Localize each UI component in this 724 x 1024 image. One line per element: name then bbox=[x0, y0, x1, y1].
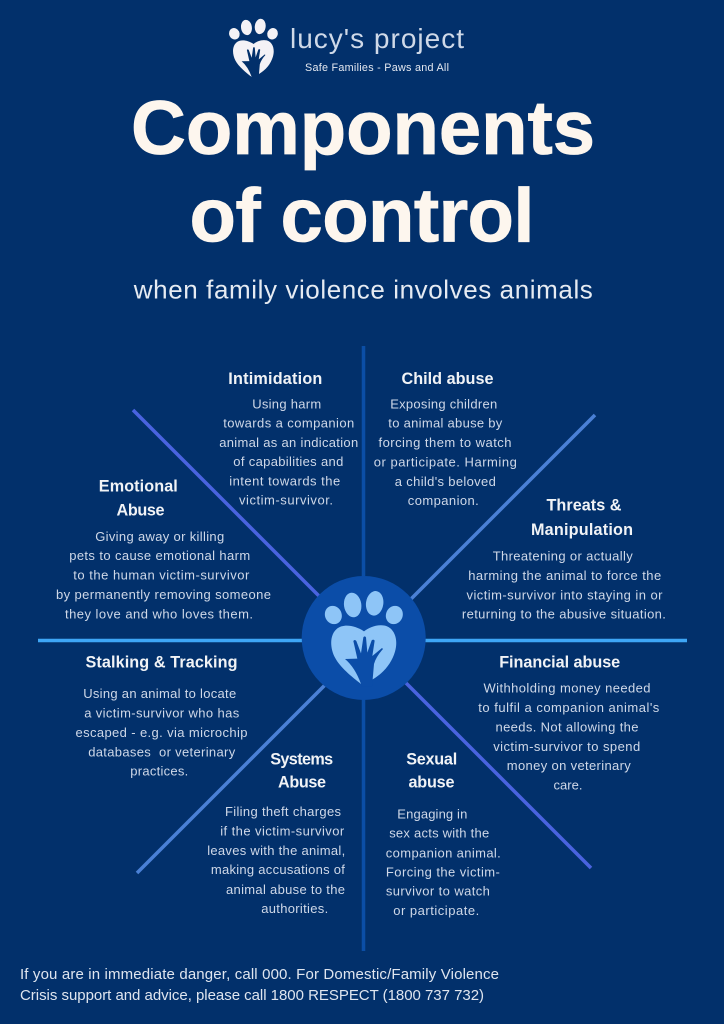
panel: sexual abuse bbox=[386, 750, 501, 918]
panel: systems abuse: Abuse bbox=[278, 774, 326, 792]
icon: logo paw and hand bbox=[227, 18, 280, 79]
panel: emotional abuse: by permanently removing someone bbox=[56, 587, 271, 602]
panel: threats and manipulation: Threats & bbox=[546, 497, 622, 515]
panel: sexual abuse: sex acts with the bbox=[389, 826, 489, 841]
panel: emotional abuse bbox=[56, 478, 271, 621]
panel: emotional abuse: Giving away or killing bbox=[95, 529, 224, 544]
panel: stalking and tracking: databases or veterinary bbox=[88, 744, 236, 760]
panel: sexual abuse: survivor to watch bbox=[386, 884, 490, 899]
panel: threats and manipulation bbox=[462, 497, 666, 622]
panel: intimidation: Intimidation bbox=[228, 370, 322, 388]
panel: intimidation: Using harm bbox=[252, 396, 321, 411]
panel: stalking and tracking: Using an animal to locate bbox=[83, 686, 236, 701]
panel: child abuse bbox=[374, 370, 517, 508]
panel: child abuse: Child abuse bbox=[402, 370, 494, 388]
panel: child abuse: Exposing children bbox=[390, 396, 497, 411]
title: Components bbox=[131, 86, 595, 171]
panel: stalking and tracking: a victim-survivor who has bbox=[84, 706, 240, 721]
spoke diagram lines bbox=[38, 346, 687, 951]
panel: sexual abuse: Engaging in bbox=[397, 806, 467, 821]
panel: child abuse: companion. bbox=[408, 493, 479, 508]
panel: intimidation: of capabilities and bbox=[233, 454, 343, 469]
panel: systems abuse: if the victim-survivor bbox=[220, 824, 345, 839]
panel: systems abuse: Filing theft charges bbox=[225, 804, 342, 819]
panel: child abuse: or participate. Harming bbox=[374, 454, 517, 470]
panel: stalking and tracking: escaped - e.g. via microchip bbox=[76, 725, 248, 740]
panel: financial abuse: needs. Not allowing the bbox=[496, 720, 638, 735]
panel: systems abuse: Systems bbox=[270, 750, 333, 768]
panel: sexual abuse: abuse bbox=[408, 774, 454, 792]
panel: child abuse: forcing them to watch bbox=[378, 435, 512, 450]
panel: threats and manipulation: victim-survivor into staying in or bbox=[466, 587, 663, 602]
panel: threats and manipulation: returning to the abusive situation. bbox=[462, 607, 666, 622]
panel: emotional abuse: Abuse bbox=[116, 501, 164, 519]
panel: financial abuse bbox=[478, 653, 660, 792]
panel: emotional abuse: pets to cause emotional harm bbox=[69, 548, 250, 563]
panel: systems abuse bbox=[207, 750, 345, 916]
panel: financial abuse: money on veterinary bbox=[507, 758, 631, 773]
logo: lucy's project bbox=[227, 18, 464, 79]
title bbox=[131, 86, 595, 258]
panel: emotional abuse: Emotional bbox=[99, 478, 178, 496]
panel: sexual abuse: Forcing the victim- bbox=[386, 865, 500, 880]
panel: financial abuse: Withholding money needed bbox=[484, 681, 650, 696]
panel: financial abuse: care. bbox=[554, 777, 582, 792]
panel: systems abuse: authorities. bbox=[261, 901, 328, 916]
panel: child abuse: a child's beloved bbox=[395, 474, 496, 489]
panel: emotional abuse: they love and who loves them. bbox=[65, 606, 253, 621]
panel: financial abuse: to fulfil a companion animal's bbox=[478, 700, 660, 715]
panel: stalking and tracking: Stalking & Tracking bbox=[86, 653, 238, 671]
panel: sexual abuse: Sexual bbox=[406, 750, 457, 768]
panel: stalking and tracking bbox=[76, 653, 248, 778]
panel: sexual abuse: or participate. bbox=[393, 903, 479, 918]
title: of control bbox=[190, 174, 534, 258]
panel: systems abuse: animal abuse to the bbox=[226, 882, 345, 897]
footer: crisis support: If you are in immediate danger, call 000. For Domestic/Family Violence bbox=[20, 966, 499, 983]
panel: intimidation: victim-survivor. bbox=[239, 492, 333, 508]
panel: intimidation: towards a companion bbox=[223, 416, 354, 431]
logo wordmark: lucy's project bbox=[290, 23, 464, 54]
panel: systems abuse: making accusations of bbox=[211, 862, 345, 877]
panel: threats and manipulation: Manipulation bbox=[531, 521, 633, 539]
panel: financial abuse: Financial abuse bbox=[499, 653, 620, 671]
central badge: paw and hand bbox=[302, 576, 426, 700]
panel: intimidation: intent towards the bbox=[229, 473, 340, 488]
footer: crisis support bbox=[20, 966, 499, 1004]
panel: stalking and tracking: practices. bbox=[130, 764, 188, 778]
panel: emotional abuse: to the human victim-survivor bbox=[73, 567, 250, 582]
panel: sexual abuse: companion animal. bbox=[386, 845, 501, 860]
panel: child abuse: to animal abuse by bbox=[388, 416, 503, 431]
panel: financial abuse: victim-survivor to spend bbox=[493, 739, 640, 754]
footer: crisis support: Crisis support and advice, please call 1800 RESPECT (1800 737 732) bbox=[20, 987, 484, 1004]
panel: intimidation bbox=[219, 370, 358, 508]
logo tagline: Safe Families - Paws and All bbox=[305, 62, 449, 74]
panel: threats and manipulation: Threatening or actually bbox=[493, 549, 633, 564]
panel: intimidation: animal as an indication bbox=[219, 435, 358, 450]
panel: systems abuse: leaves with the animal, bbox=[207, 843, 345, 858]
panel: threats and manipulation: harming the animal to force the bbox=[468, 568, 661, 583]
subtitle: when family violence involves animals bbox=[133, 274, 593, 304]
